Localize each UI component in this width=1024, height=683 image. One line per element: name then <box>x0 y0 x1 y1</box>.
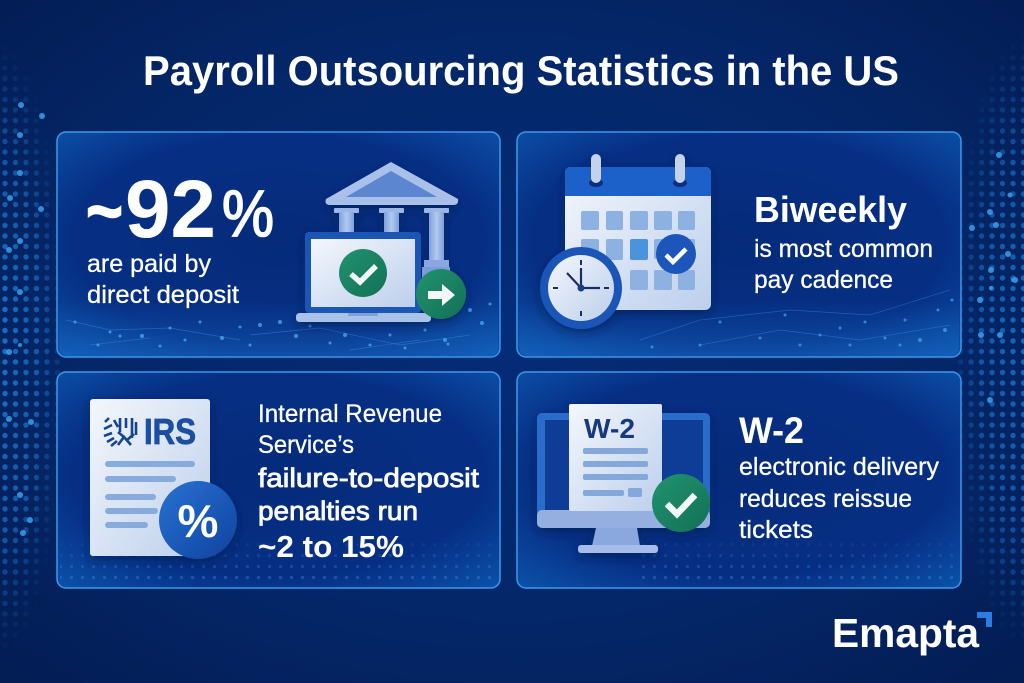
icon: monitor with W-2 form: W-2 <box>584 413 635 444</box>
text: electronic delivery reduces reissue tickets: tickets <box>739 516 813 544</box>
text: IRS penalties <box>258 400 480 564</box>
icon: monitor with W-2 form <box>537 404 710 553</box>
panel texture: data network <box>519 290 959 356</box>
text: electronic delivery reduces reissue tickets <box>739 453 939 544</box>
panel texture: dot rows <box>60 543 491 579</box>
icon: green check badge <box>652 474 710 532</box>
panel: IRS penalties <box>57 372 500 588</box>
icon: bank with laptop <box>296 162 466 322</box>
text: IRS penalties: penalties run <box>258 496 418 526</box>
icon: IRS seal <box>104 418 136 446</box>
logo: Emapta: Emapta <box>832 610 980 656</box>
icon: green arrow badge <box>416 269 466 319</box>
text: are paid by direct deposit: direct deposit <box>87 281 239 309</box>
text: electronic delivery reduces reissue tickets: electronic delivery <box>739 453 939 481</box>
logo corner mark <box>977 612 992 627</box>
text: is most common pay cadence: pay cadence <box>754 266 893 294</box>
icon: percent badge <box>159 481 237 559</box>
statistic: ~92%: ~ <box>86 169 123 252</box>
icon: check badge <box>656 234 696 274</box>
icon: percent badge: % <box>178 495 218 547</box>
icon: clock <box>540 247 622 329</box>
text: is most common pay cadence: is most common <box>754 235 933 263</box>
icon: calendar with clock <box>540 154 711 329</box>
panel texture: dot rows <box>642 543 953 579</box>
icon: green check badge <box>339 249 387 297</box>
icon: IRS document: IRS <box>144 411 196 452</box>
panel texture: data network <box>59 300 498 356</box>
text: are paid by direct deposit <box>87 250 239 309</box>
text: are paid by direct deposit: are paid by <box>87 250 211 278</box>
text: IRS penalties: Service’s <box>258 431 354 459</box>
statistic: ~92% <box>86 164 274 255</box>
panel: W-2 delivery <box>517 372 961 588</box>
text: electronic delivery reduces reissue tickets: reduces reissue <box>739 485 912 513</box>
text: IRS penalties: Internal Revenue <box>258 400 442 428</box>
title: Payroll Outsourcing Statistics in the US <box>143 47 899 94</box>
text: is most common pay cadence <box>754 235 933 294</box>
icon: IRS document <box>90 399 237 559</box>
statistic: ~92%: % <box>222 176 274 250</box>
text: W-2: W-2 <box>739 410 804 451</box>
text: IRS penalties: failure-to-deposit <box>258 463 480 493</box>
panel: biweekly <box>517 132 961 357</box>
text: biweekly: Biweekly <box>754 189 907 230</box>
panel: direct deposit <box>57 132 500 357</box>
statistic: ~92%: 92 <box>125 164 216 255</box>
text: IRS penalties: ~2 to 15% <box>258 529 404 564</box>
